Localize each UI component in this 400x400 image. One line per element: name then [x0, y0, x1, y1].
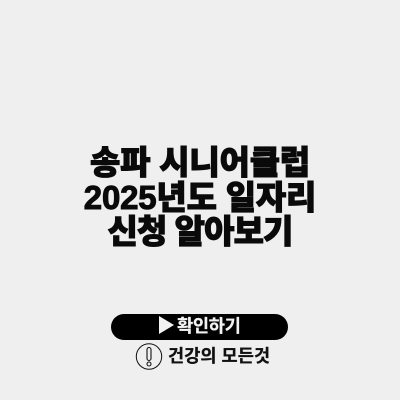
title — [84, 144, 316, 250]
brand label: 건강의 모든것 — [168, 346, 270, 366]
title: 송파 시니어클럽 — [90, 144, 310, 181]
title: 2025년도 일자리 — [84, 179, 316, 216]
icon: play triangle — [159, 316, 174, 334]
title: 신청 알아보기 — [107, 213, 293, 250]
icon: exclamation circle — [136, 343, 162, 370]
button: 확인하기 — [111, 314, 288, 340]
button label: 확인하기 — [177, 316, 241, 336]
